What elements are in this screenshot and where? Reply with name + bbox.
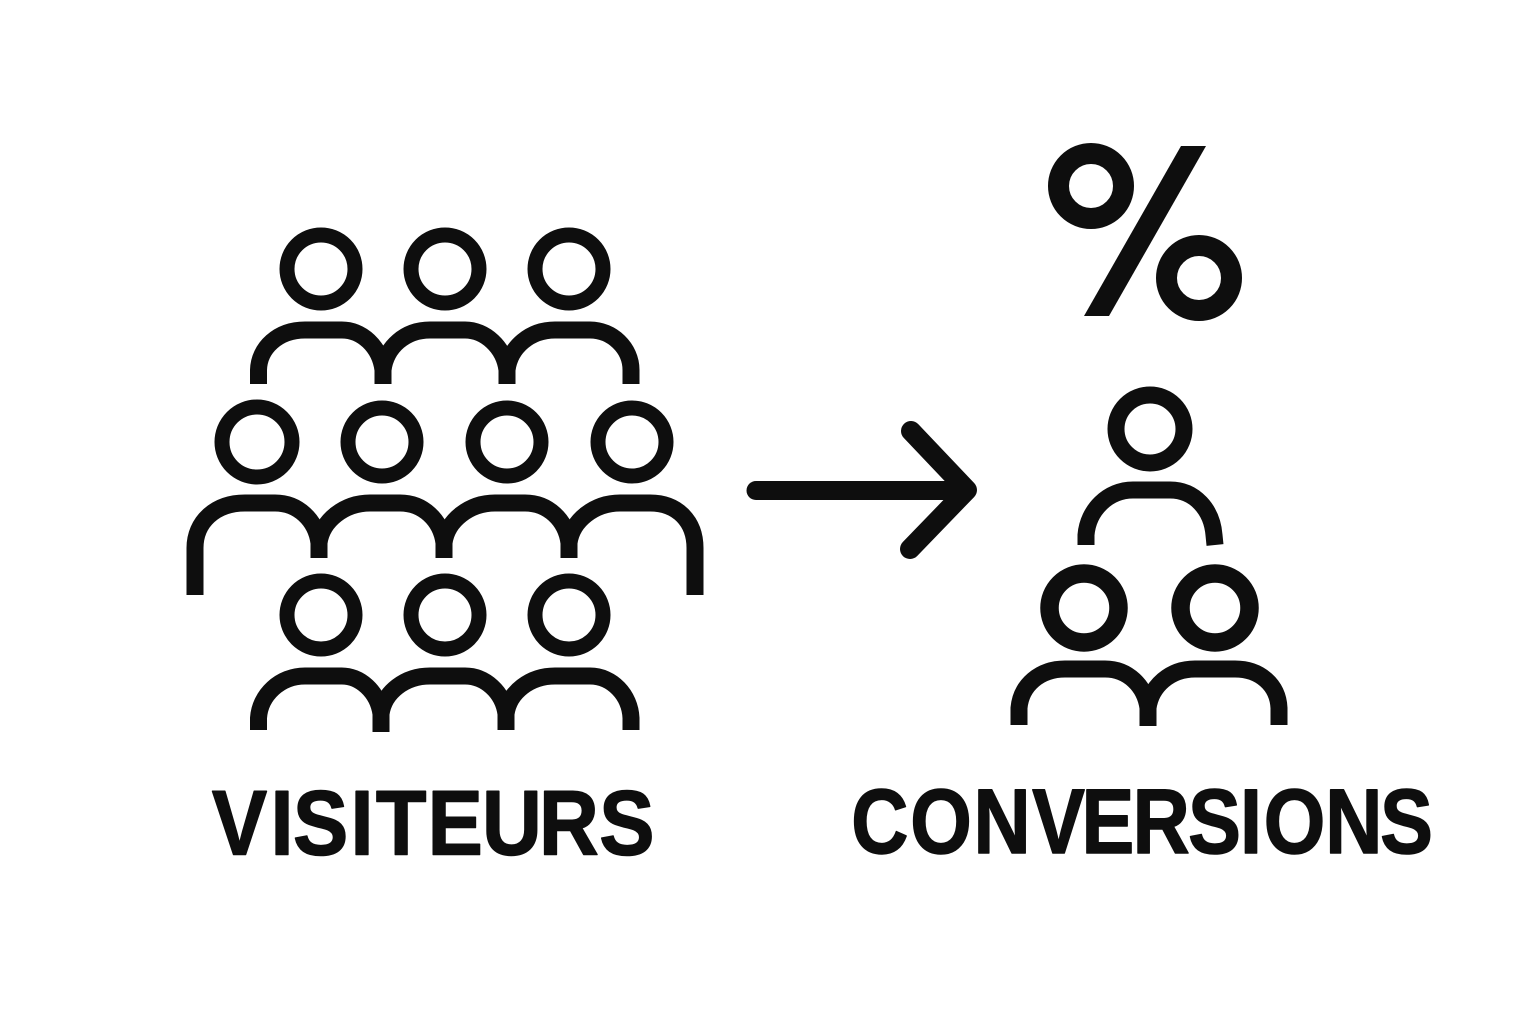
label: visiteurs: VISITEURS	[212, 771, 654, 874]
row 2 heads	[222, 407, 666, 477]
row 1 bodies	[258, 330, 631, 384]
row 2 bodies	[195, 503, 695, 595]
icon: percent sign	[1058, 146, 1232, 316]
label: conversions: CONVERSIONS	[851, 770, 1433, 873]
row 1 heads	[287, 235, 603, 303]
icon: conversions group	[1019, 395, 1279, 726]
bottom bodies	[1019, 669, 1279, 726]
top person	[1086, 395, 1215, 545]
arrow	[756, 431, 967, 549]
row 3 bodies	[258, 676, 631, 732]
bottom heads	[1050, 574, 1250, 642]
row 3 heads	[287, 581, 603, 649]
icon: visitors crowd	[195, 235, 695, 732]
